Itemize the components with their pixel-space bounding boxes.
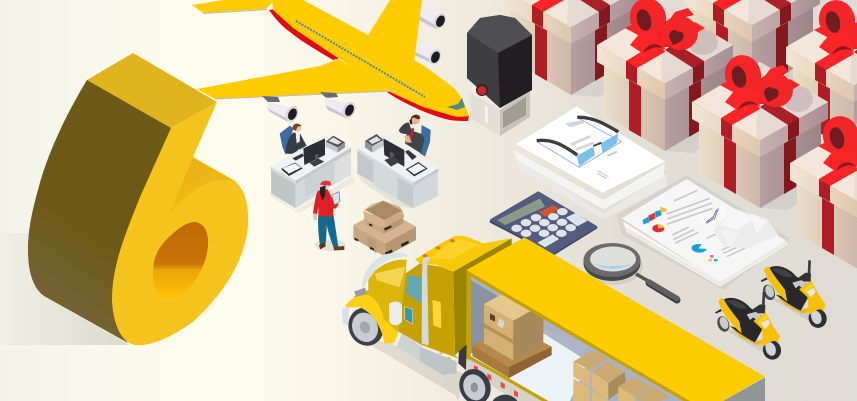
keyboard [292, 153, 304, 161]
main wing [197, 59, 393, 99]
monitor [303, 138, 325, 165]
woman with clipboard [313, 181, 345, 251]
gift middle [597, 0, 750, 153]
right desk [357, 134, 438, 208]
left agent [280, 124, 307, 156]
number six shadow [0, 233, 130, 345]
front scooter [715, 292, 784, 362]
document stack with glasses [513, 107, 667, 219]
office scene [268, 115, 438, 257]
red belly stripes [269, 9, 340, 60]
cardboard boxes [353, 201, 416, 257]
gift right [786, 0, 857, 155]
roof fairing [415, 236, 512, 272]
legend marks [708, 255, 718, 261]
gift top left [503, 0, 656, 97]
upper wing [368, 0, 422, 62]
pie chart mini [652, 224, 664, 232]
truck ground shadow [345, 330, 463, 401]
monitor [383, 138, 404, 167]
trailer frame post [466, 270, 471, 362]
sleeper dark side [453, 238, 512, 355]
trailer bed rail [466, 358, 548, 401]
left desk [270, 135, 351, 208]
rear scooter [761, 260, 829, 330]
big number six [28, 53, 248, 345]
gift front centre [692, 51, 845, 210]
rear wheels [491, 395, 519, 401]
trailer roof [467, 237, 765, 401]
magnifying glass [584, 243, 677, 300]
tablet [281, 163, 303, 176]
printer [326, 136, 345, 147]
mud flap [458, 343, 467, 370]
hood [353, 260, 407, 343]
right agent [399, 115, 431, 157]
front wheel [343, 302, 389, 351]
six front face [112, 102, 248, 345]
stacked boxes [573, 350, 670, 401]
six counter hole [153, 222, 208, 298]
line chart mini [695, 208, 728, 227]
gift bottom right [790, 112, 857, 271]
printer [365, 134, 383, 146]
crumpled paper [713, 208, 778, 248]
cab window [406, 275, 421, 303]
trailer interior [466, 272, 690, 401]
blue pie mini [692, 244, 707, 253]
roof marker lights [422, 239, 455, 257]
semi truck [342, 236, 765, 401]
airplane [192, 0, 469, 124]
rear wing engines [414, 0, 448, 67]
calculator [491, 192, 596, 254]
exhaust stack [422, 257, 431, 345]
small door window [405, 307, 413, 324]
gift boxes [503, 0, 857, 271]
bar chart mini [643, 217, 649, 224]
pallet cargo [472, 287, 552, 378]
fender [346, 295, 398, 343]
tail stabilizer [192, 0, 274, 13]
air tank [389, 302, 402, 325]
windshield [362, 253, 408, 288]
fuselage [272, 0, 469, 117]
six inner notch [168, 158, 235, 217]
self-inking stamp [467, 15, 532, 136]
cab side [398, 263, 458, 358]
six top face [87, 53, 217, 128]
report document stack [617, 175, 790, 290]
six dark side [28, 80, 171, 343]
text lines [667, 190, 747, 257]
left engines under wing [262, 92, 358, 124]
delivery scooters [715, 260, 829, 362]
desk floor shadows [268, 177, 355, 213]
trailer floor [471, 333, 588, 401]
tablet [406, 162, 428, 176]
door panel [432, 300, 441, 329]
keyboard [405, 150, 417, 160]
cockpit window [447, 98, 465, 110]
front bumper [342, 307, 349, 325]
trailer rear door [723, 377, 765, 401]
gift top centre [684, 0, 837, 95]
window row [296, 21, 425, 97]
running boards [397, 333, 422, 362]
eyeglasses [537, 117, 621, 167]
